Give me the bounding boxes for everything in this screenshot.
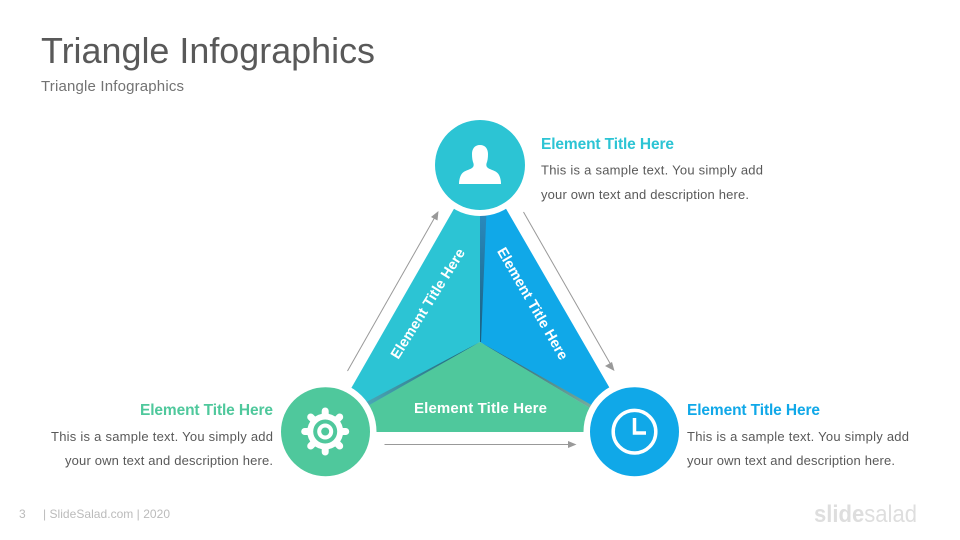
arrow: bottom [384, 441, 576, 448]
segment label: right: Element Title Here [493, 245, 571, 363]
icon: gear circle [281, 387, 370, 476]
segment: green [360, 342, 600, 432]
text block: top: Element Title Here [541, 136, 674, 153]
icon: clock circle [590, 387, 679, 476]
text block: top [541, 136, 763, 202]
segment label: left: Element Title Here [388, 246, 469, 362]
segment label: bottom: Element Title Here [414, 400, 547, 417]
segment: teal [345, 200, 480, 412]
fold shadows [360, 200, 600, 414]
logo: slidesalad [814, 501, 917, 528]
text block: left: This is a sample text. You simply add [51, 429, 273, 444]
title: Triangle Infographics [41, 30, 375, 71]
text block: left: Element Title Here [140, 402, 273, 419]
text block: right [687, 402, 909, 468]
text block: right: This is a sample text. You simply add [687, 429, 909, 444]
text block: right: Element Title Here [687, 402, 820, 419]
page number: 3 [19, 507, 26, 521]
text block: left [51, 402, 273, 468]
arrow: right side down [524, 212, 614, 371]
arrow: left side up [348, 211, 438, 371]
text block: top: your own text and description here. [541, 187, 749, 202]
segment: blue [480, 200, 616, 414]
subtitle: Triangle Infographics [41, 78, 184, 95]
text block: right: your own text and description here. [687, 453, 895, 468]
text block: top: This is a sample text. You simply add [541, 162, 763, 178]
icon: person circle [435, 120, 525, 210]
text block: left: your own text and description here. [65, 453, 273, 468]
triangle diagram [274, 114, 686, 483]
footer text: | SlideSalad.com | 2020 [43, 507, 170, 521]
